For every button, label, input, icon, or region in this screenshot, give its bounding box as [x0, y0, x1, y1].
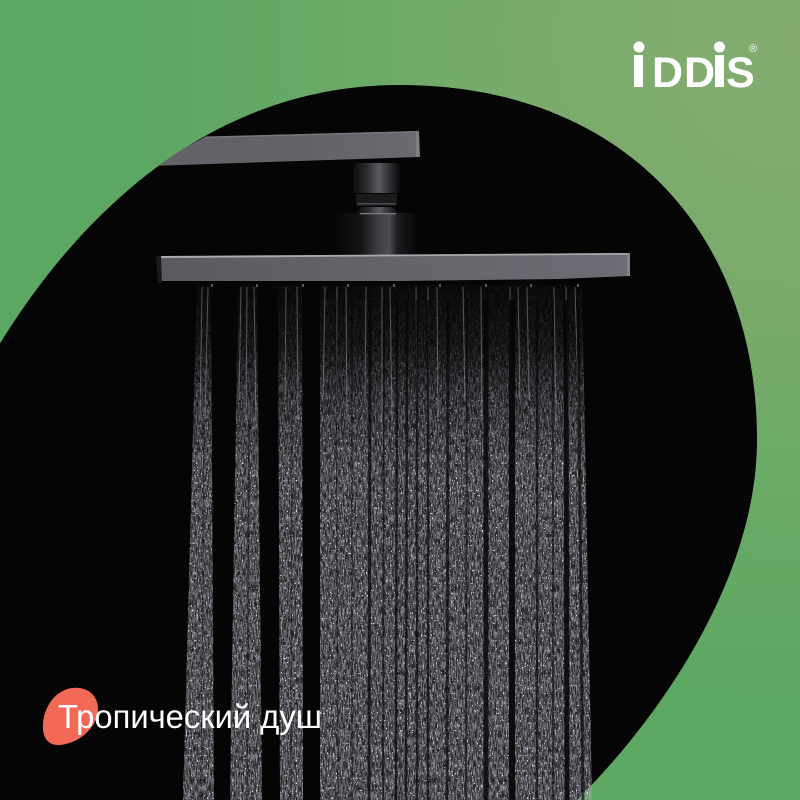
caption — [43, 688, 322, 745]
logo letter i shapes — [634, 42, 725, 87]
water texture — [170, 280, 610, 800]
shower arm — [150, 131, 420, 166]
falling water streams — [170, 280, 610, 800]
shower connector — [337, 163, 417, 255]
shower head plate — [156, 253, 630, 283]
iddis logo: iDDiS — [634, 49, 755, 97]
dark gaps between strands — [201, 300, 583, 800]
nozzle ticks — [212, 284, 578, 287]
water base tone — [183, 285, 592, 800]
caption text: Тропический душ — [58, 698, 322, 735]
registered mark: ® — [749, 43, 757, 55]
coral accent blob — [43, 688, 98, 745]
bright water strands near the nozzles — [200, 287, 579, 420]
